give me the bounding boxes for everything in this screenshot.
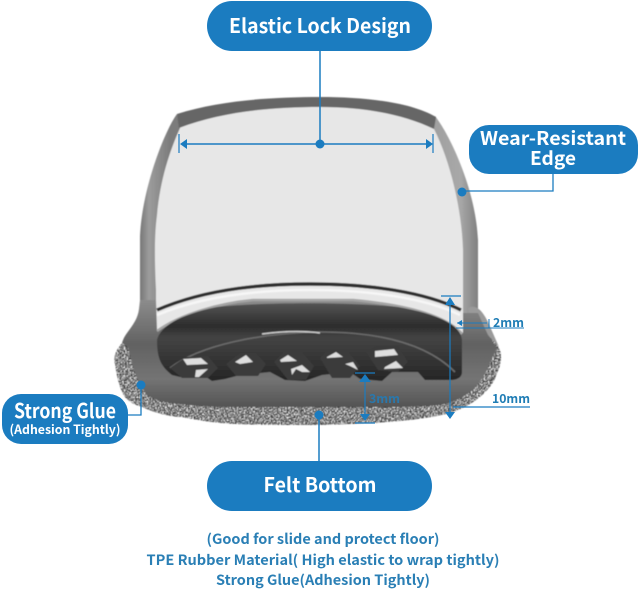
pill: Wear-Resistant Edge bbox=[469, 124, 638, 174]
pill: Elastic Lock Design: Elastic Lock Design bbox=[229, 10, 411, 39]
caption text block bbox=[146, 529, 500, 590]
dimension: 10mm bbox=[441, 296, 530, 419]
inner cavity rim bbox=[157, 300, 462, 334]
dimension: width arrow bbox=[179, 134, 433, 153]
caption text block: (Good for slide and protect floor) bbox=[206, 529, 440, 549]
callout: elastic lock design bbox=[207, 1, 432, 144]
rubber top band bbox=[177, 97, 436, 129]
rubber body bbox=[122, 300, 497, 407]
inner cavity bbox=[157, 303, 462, 381]
pill: Strong Glue: (Adhesion Tightly) bbox=[10, 419, 120, 438]
thin elastic ring bbox=[157, 284, 461, 310]
product: felt pad with elastic rubber cap bbox=[114, 97, 501, 425]
glass interior bbox=[148, 107, 470, 340]
pill: Wear-Resistant Edge: Edge bbox=[530, 144, 576, 171]
dimension: 2mm: 2mm bbox=[493, 312, 524, 331]
pill: Felt Bottom: Felt Bottom bbox=[264, 469, 376, 498]
pill: Strong Glue: Strong Glue bbox=[14, 395, 116, 424]
caption text block: TPE Rubber Material( High elastic to wrap tightly) bbox=[146, 550, 500, 570]
tooth shadows bbox=[170, 346, 408, 380]
callout: wear-resistant edge bbox=[458, 124, 638, 196]
dimension: 10mm: 10mm bbox=[492, 388, 530, 407]
rubber left band bbox=[140, 114, 180, 330]
pill: Elastic Lock Design bbox=[207, 1, 432, 51]
callout: felt bottom bbox=[207, 410, 432, 511]
callout: strong glue bbox=[2, 380, 146, 444]
pill: Wear-Resistant Edge: Wear-Resistant bbox=[480, 124, 626, 151]
pill: Strong Glue bbox=[2, 394, 128, 444]
dimension: 3mm: 3mm bbox=[369, 388, 400, 407]
caption text block: Strong Glue(Adhesion Tightly) bbox=[216, 570, 430, 590]
dimension: 3mm bbox=[355, 373, 400, 423]
rubber right band bbox=[434, 116, 478, 333]
dimension: 2mm bbox=[456, 312, 524, 331]
pill: Felt Bottom bbox=[207, 461, 432, 511]
felt sliver right bbox=[468, 307, 499, 347]
felt base bbox=[114, 333, 501, 425]
metal teeth highlights bbox=[183, 349, 403, 377]
